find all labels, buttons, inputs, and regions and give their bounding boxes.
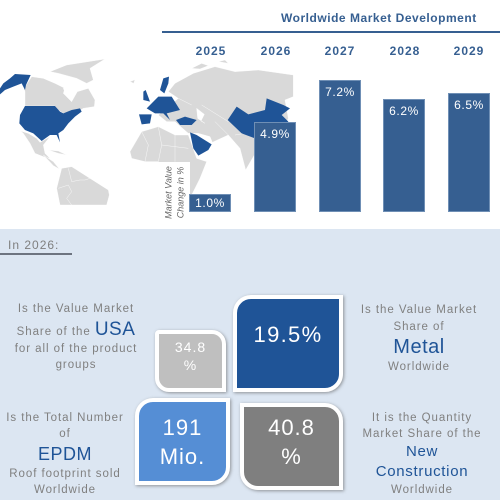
bar 2027	[319, 80, 361, 212]
text: New Construction: Construction	[376, 463, 468, 480]
text: Metal	[361, 304, 477, 373]
bar 2026: 4.9%	[260, 127, 290, 141]
text: USA share: Share of the USA	[17, 319, 135, 340]
bar 2028	[383, 99, 425, 212]
box: 40.8%	[240, 403, 343, 490]
section heading: In 2026:	[8, 238, 59, 252]
text: EPDM: of	[59, 428, 71, 440]
text: Metal: Metal	[393, 336, 445, 358]
text: New Construction: Worldwide	[391, 484, 453, 496]
text: USA share: groups	[56, 359, 96, 371]
text: New Construction: Market Share of the	[362, 428, 482, 440]
bar 2026	[254, 122, 296, 212]
text: New Construction: New	[406, 443, 438, 460]
text: USA share: for all of the product	[15, 343, 137, 355]
text: EPDM: Is the Total Number	[6, 412, 124, 424]
text: EPDM: Worldwide	[34, 484, 96, 496]
box: 191 Mio.: Mio.	[160, 444, 205, 469]
box: 34.8%: %	[184, 357, 197, 373]
year label 2026: 2026	[261, 44, 291, 58]
axis label box	[158, 162, 190, 222]
bar 2029	[448, 93, 490, 212]
year label 2028: 2028	[390, 44, 420, 58]
bar 2025	[189, 194, 231, 212]
highlighted countries: americas	[0, 74, 82, 142]
box: 34.8%: 34.8	[175, 339, 206, 355]
icon: Saudi Arabia	[190, 132, 212, 156]
icon: China	[228, 98, 290, 138]
box: 40.8%: %	[281, 444, 302, 469]
year label 2027: 2027	[325, 44, 355, 58]
box: 19.5%	[233, 295, 343, 392]
text: USA share: Is the Value Market	[18, 303, 134, 315]
text: EPDM: EPDM	[38, 444, 92, 464]
box: 191 Mio.: 191	[163, 415, 202, 440]
bar 2025: 1.0%	[195, 196, 225, 210]
americas land	[21, 59, 109, 205]
text: EPDM: Roof footprint sold	[9, 468, 121, 480]
year label 2029: 2029	[454, 44, 484, 58]
bar 2029: 6.5%	[454, 98, 484, 112]
icon: Alaska	[0, 74, 31, 94]
year label 2025: 2025	[196, 44, 226, 58]
text: EPDM	[6, 412, 124, 496]
axis label text: Market Value Change in %	[164, 166, 185, 219]
bar 2027: 7.2%	[325, 85, 355, 99]
text: New Construction: It is the Quantity	[372, 412, 472, 424]
box: 191 Mio.	[135, 398, 230, 485]
box: 34.8%	[155, 330, 226, 392]
highlighted countries: eurasia	[139, 77, 290, 156]
text: New Construction	[362, 412, 482, 496]
text: Metal: Is the Value Market	[361, 304, 477, 316]
icon: UK	[143, 90, 150, 102]
title: Worldwide Market Development	[281, 11, 477, 25]
box: 19.5%: 19.5%	[254, 322, 322, 347]
bar 2028: 6.2%	[389, 104, 419, 118]
box: 40.8%: 40.8	[268, 415, 315, 440]
icon: Sweden	[160, 77, 169, 93]
icon: Iberia	[139, 114, 152, 124]
icon: USA	[19, 106, 82, 142]
icon: Turkey	[176, 117, 197, 125]
eurasia and africa land	[130, 60, 293, 210]
text: Metal: Share of	[393, 321, 445, 333]
text: USA share	[14, 303, 137, 371]
bottom panel	[0, 229, 500, 500]
text: Metal: Worldwide	[388, 361, 450, 373]
world map	[0, 60, 293, 205]
icon: Central Europe	[147, 97, 180, 120]
